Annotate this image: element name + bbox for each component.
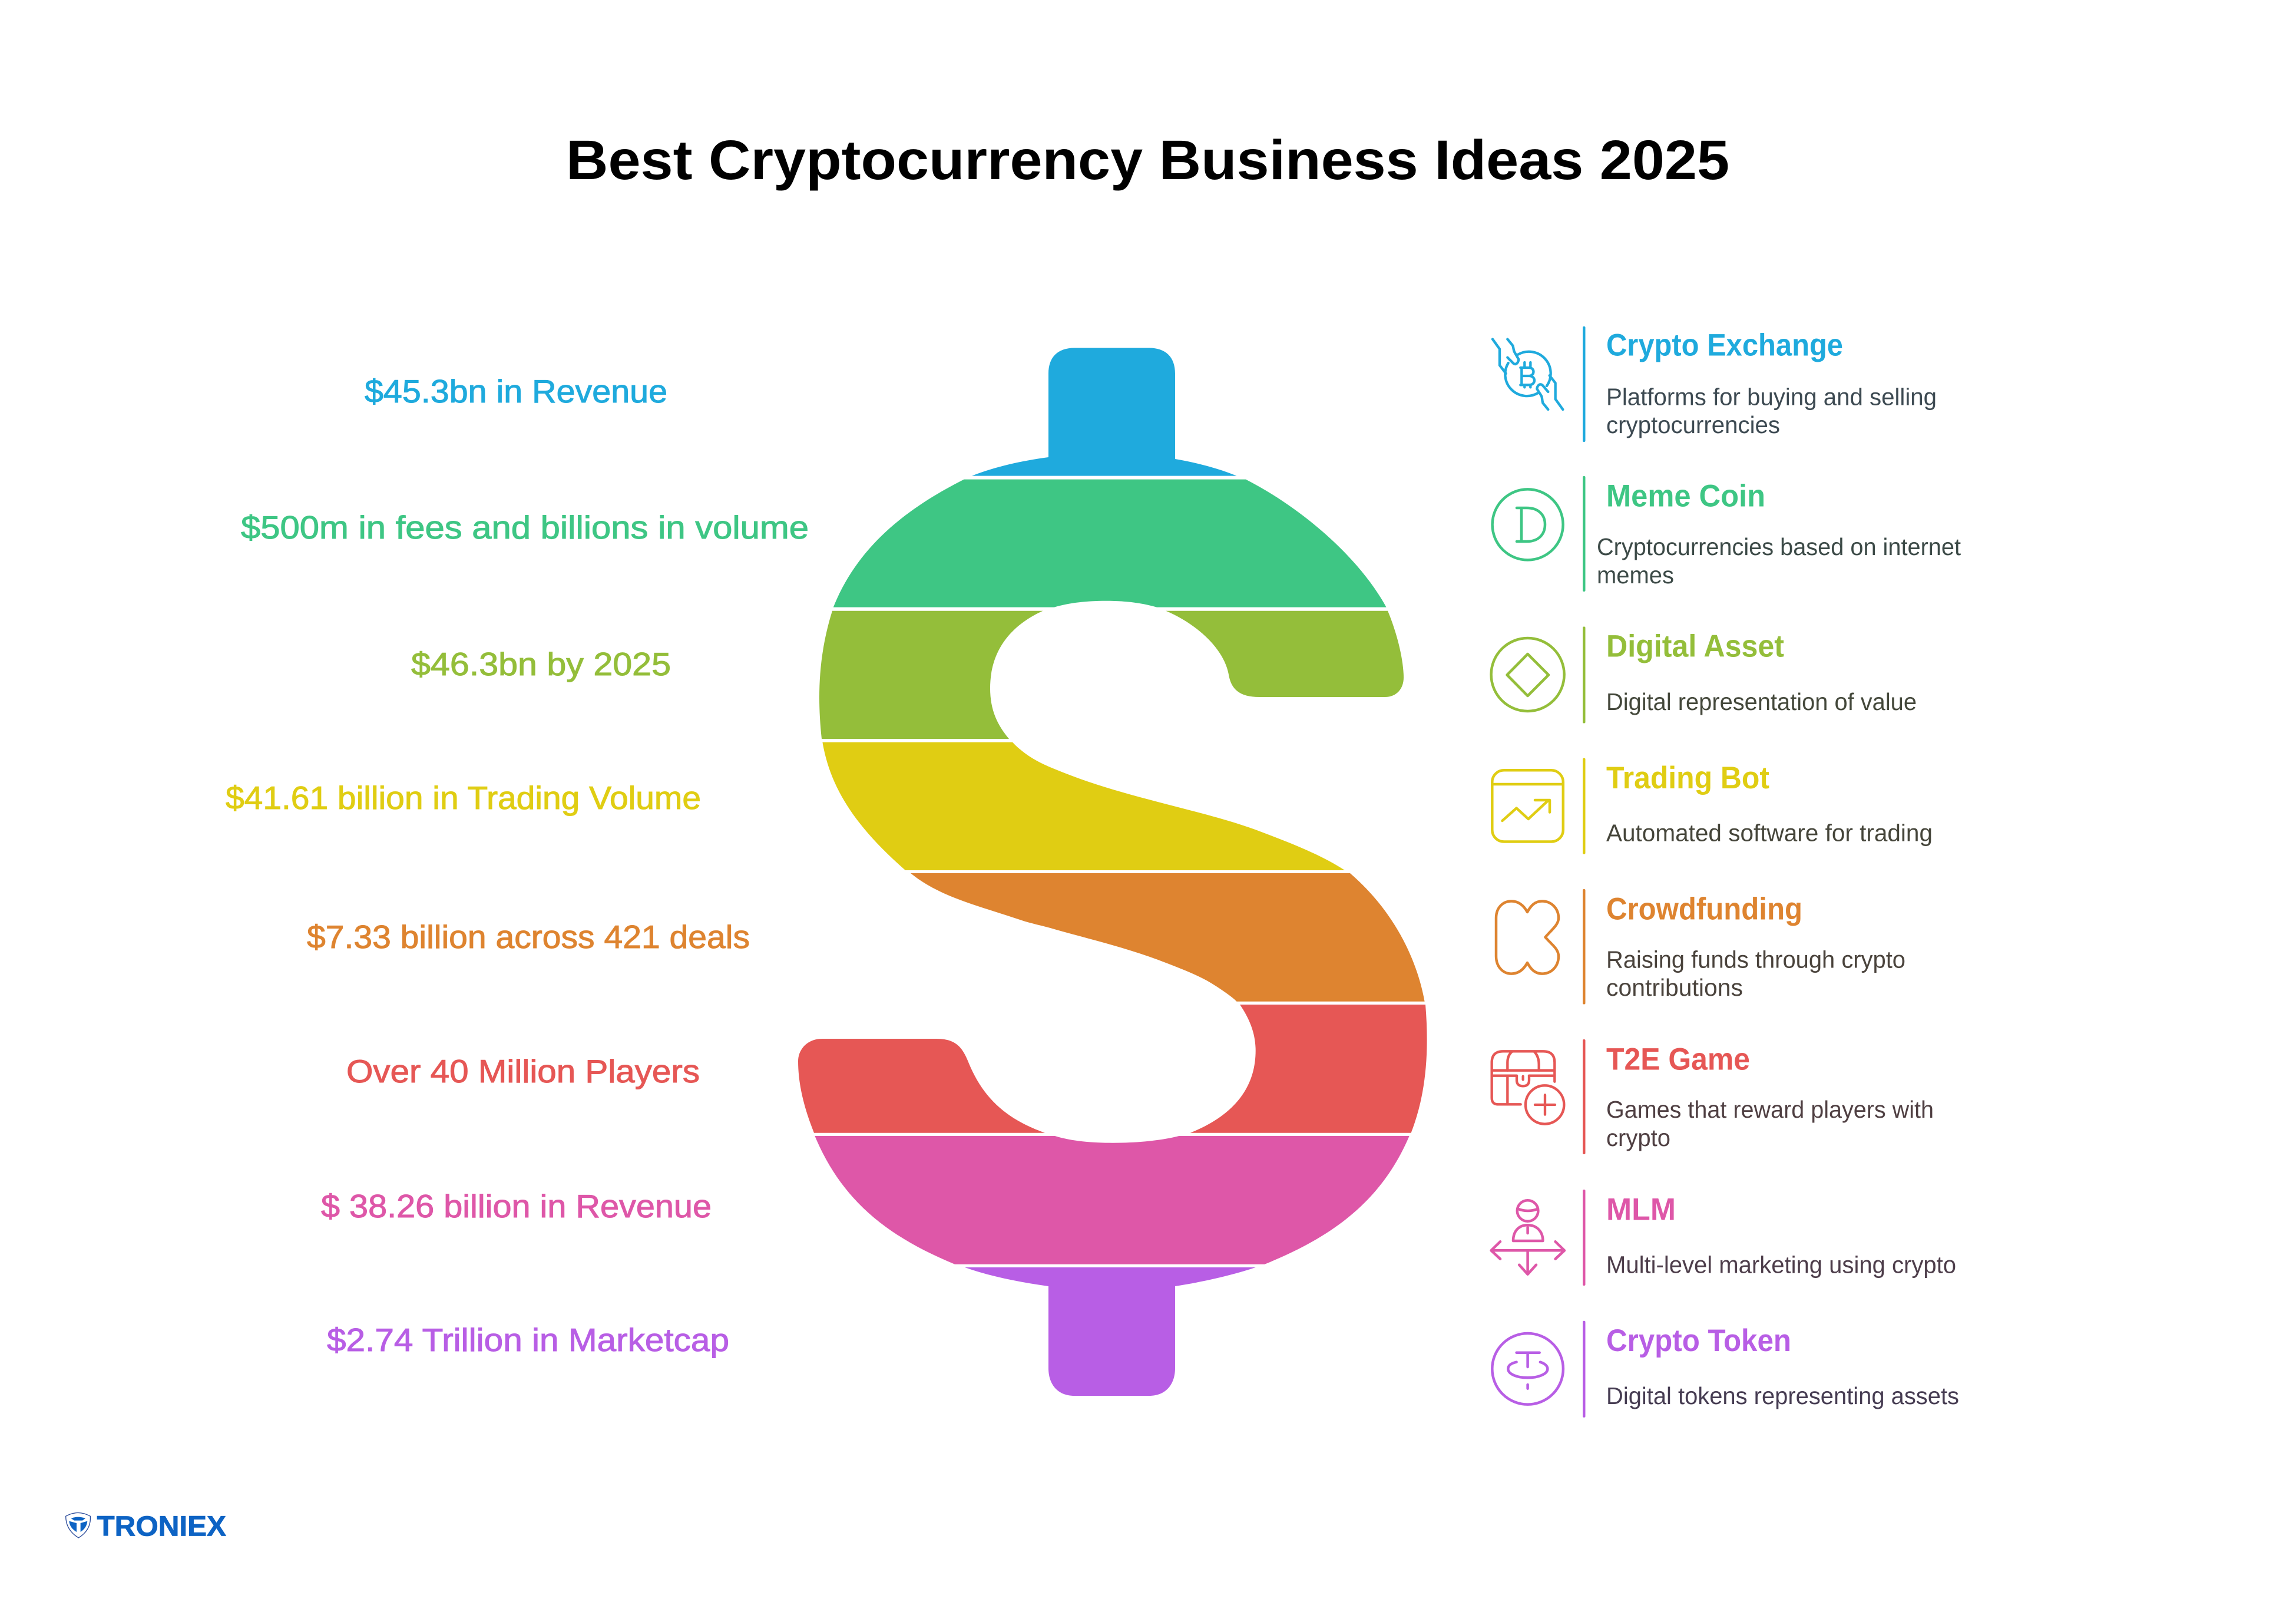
divider xyxy=(1583,627,1586,724)
description: memes xyxy=(1597,562,1674,589)
heading: Digital Asset xyxy=(1606,629,1784,663)
description: Automated software for trading xyxy=(1606,820,1933,847)
divider xyxy=(1583,326,1586,442)
divider xyxy=(1583,889,1586,1004)
heading: Crypto Token xyxy=(1606,1323,1791,1358)
segment: orange xyxy=(911,873,1425,1002)
description xyxy=(1597,533,1961,589)
description xyxy=(1606,1096,1934,1151)
stat: crypto token marketcap: $2.74 Trillion in Marketcap xyxy=(327,1322,729,1358)
item: Meme Coin xyxy=(1493,476,1961,592)
icon: diamond coin xyxy=(1491,638,1564,711)
heading: MLM xyxy=(1606,1193,1676,1227)
icon: K crowdfunding logo xyxy=(1496,901,1559,974)
heading: Trading Bot xyxy=(1606,761,1769,795)
icon: hands exchanging bitcoin xyxy=(1493,339,1563,409)
description: cryptocurrencies xyxy=(1606,411,1780,438)
segment: yellow xyxy=(822,742,1345,870)
item: Crypto Token xyxy=(1492,1321,1959,1418)
heading: Crypto Exchange xyxy=(1606,328,1843,363)
description xyxy=(1606,946,1905,1001)
description: Platforms for buying and selling xyxy=(1606,383,1937,410)
logo: Troniex xyxy=(66,1511,226,1543)
stat: trading bot volume: $41.61 billion in Trading Volume xyxy=(226,780,701,816)
stat: meme coin fees: $500m in fees and billions in volume xyxy=(241,509,809,546)
divider xyxy=(1583,476,1586,592)
description: Raising funds through crypto xyxy=(1606,946,1905,973)
description: crypto xyxy=(1606,1124,1670,1151)
divider xyxy=(1583,1190,1586,1286)
description: Cryptocurrencies based on internet xyxy=(1597,533,1961,560)
item: Trading Bot xyxy=(1492,758,1933,854)
heading: Crowdfunding xyxy=(1606,892,1802,927)
stat: digital asset: $46.3bn by 2025 xyxy=(411,646,671,682)
icon: shield xyxy=(66,1512,90,1538)
item: Crypto Exchange xyxy=(1493,326,1937,442)
dollar sign segmented chart xyxy=(798,348,1427,1396)
icon: trading chart window xyxy=(1492,770,1563,841)
segment: olive xyxy=(819,611,1404,739)
description: Multi-level marketing using crypto xyxy=(1606,1251,1956,1279)
segment: purple bottom stem xyxy=(965,1267,1256,1396)
item: Crowdfunding xyxy=(1496,889,1905,1004)
item: Digital Asset xyxy=(1491,627,1917,724)
stat: T2E players: Over 40 Million Players xyxy=(346,1053,700,1089)
heading: Meme Coin xyxy=(1606,479,1765,514)
segment: blue top stem xyxy=(972,348,1237,476)
title: Best Cryptocurrency Business Ideas 2025 xyxy=(566,129,1729,191)
item: T2E Game xyxy=(1492,1039,1934,1154)
icon: D coin xyxy=(1493,489,1563,560)
stat: crowdfunding deals: $7.33 billion across 421 deals xyxy=(307,919,750,955)
heading: T2E Game xyxy=(1606,1042,1750,1077)
segment: red xyxy=(798,1005,1427,1133)
stat: crypto exchange revenue: $45.3bn in Revenue xyxy=(365,373,667,409)
left statistic labels xyxy=(226,373,809,1358)
description: Games that reward players with xyxy=(1606,1096,1934,1123)
segment: green xyxy=(833,480,1387,607)
divider xyxy=(1583,1039,1586,1154)
icon: treasure chest with plus xyxy=(1492,1051,1564,1124)
description: Digital representation of value xyxy=(1606,688,1917,715)
divider xyxy=(1583,1321,1586,1418)
item: MLM xyxy=(1491,1190,1956,1286)
icon: tether-style token xyxy=(1492,1333,1563,1405)
icon: person with arrows xyxy=(1491,1200,1564,1274)
description: contributions xyxy=(1606,974,1743,1001)
wordmark: TRONIEX xyxy=(97,1511,226,1543)
description xyxy=(1606,383,1937,438)
divider xyxy=(1583,758,1586,854)
description: Digital tokens representing assets xyxy=(1606,1382,1959,1409)
stat: MLM revenue: $ 38.26 billion in Revenue xyxy=(321,1188,712,1224)
segment: pink xyxy=(815,1136,1410,1264)
